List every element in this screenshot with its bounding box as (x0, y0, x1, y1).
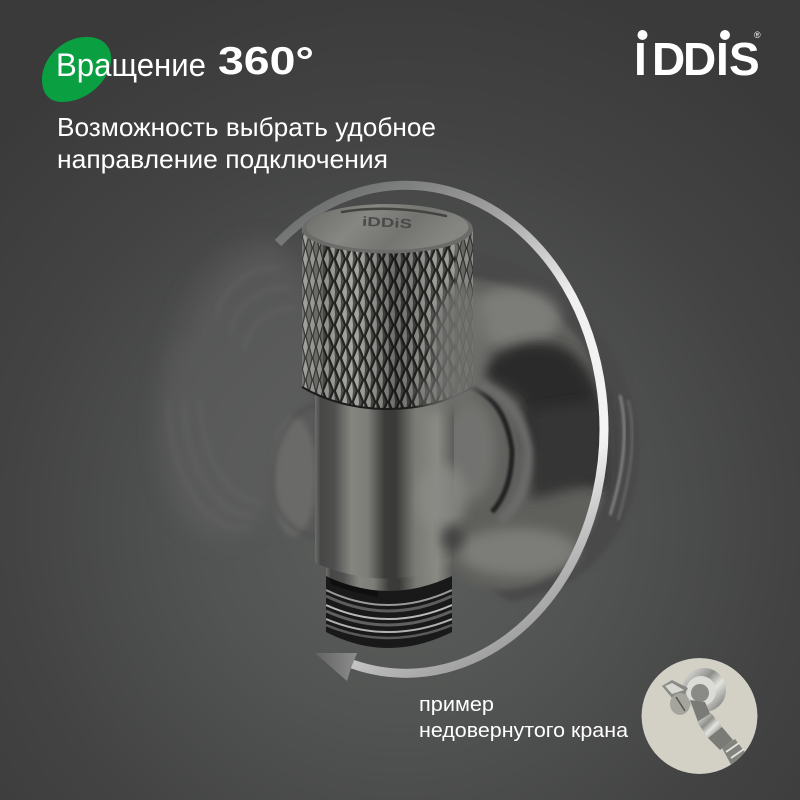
brand logo: IDDIS (634, 33, 760, 85)
caption: недовернутого крана (419, 720, 629, 742)
caption (419, 694, 629, 742)
blurred overlay on the valve body's lower right (418, 464, 466, 532)
valve body (315, 395, 454, 578)
motion blur: left ghost of rotating valve (137, 229, 343, 551)
connector (708, 727, 733, 750)
knob logo: iDDiS (362, 214, 413, 231)
subtitle: Возможность выбрать удобное (57, 112, 436, 142)
valve product (302, 204, 473, 656)
knurled knob (302, 204, 473, 415)
thread (326, 576, 452, 648)
heading: Вращение (56, 47, 206, 83)
braided hose (722, 739, 745, 764)
blurred overlay on the knob's right side (432, 283, 488, 407)
stem (690, 700, 710, 722)
subtitle (57, 112, 436, 174)
motion blur: right ghost of rotating flange (440, 250, 640, 602)
handle (662, 680, 688, 698)
brand logo: ® (754, 30, 761, 40)
caption: пример (419, 694, 494, 716)
flange (682, 668, 726, 712)
subtitle: направление подключения (57, 144, 388, 174)
arrow head (315, 653, 357, 681)
knob marking (342, 209, 446, 216)
knob top face (302, 204, 473, 254)
green accent blob (42, 37, 111, 102)
screw head (670, 693, 690, 715)
rotation arc with arrow (278, 185, 604, 681)
heading number: 360° (218, 40, 314, 83)
lower collar (326, 555, 452, 591)
thread slot (329, 578, 378, 597)
hex nut (697, 713, 722, 738)
example photo inset (642, 658, 758, 774)
